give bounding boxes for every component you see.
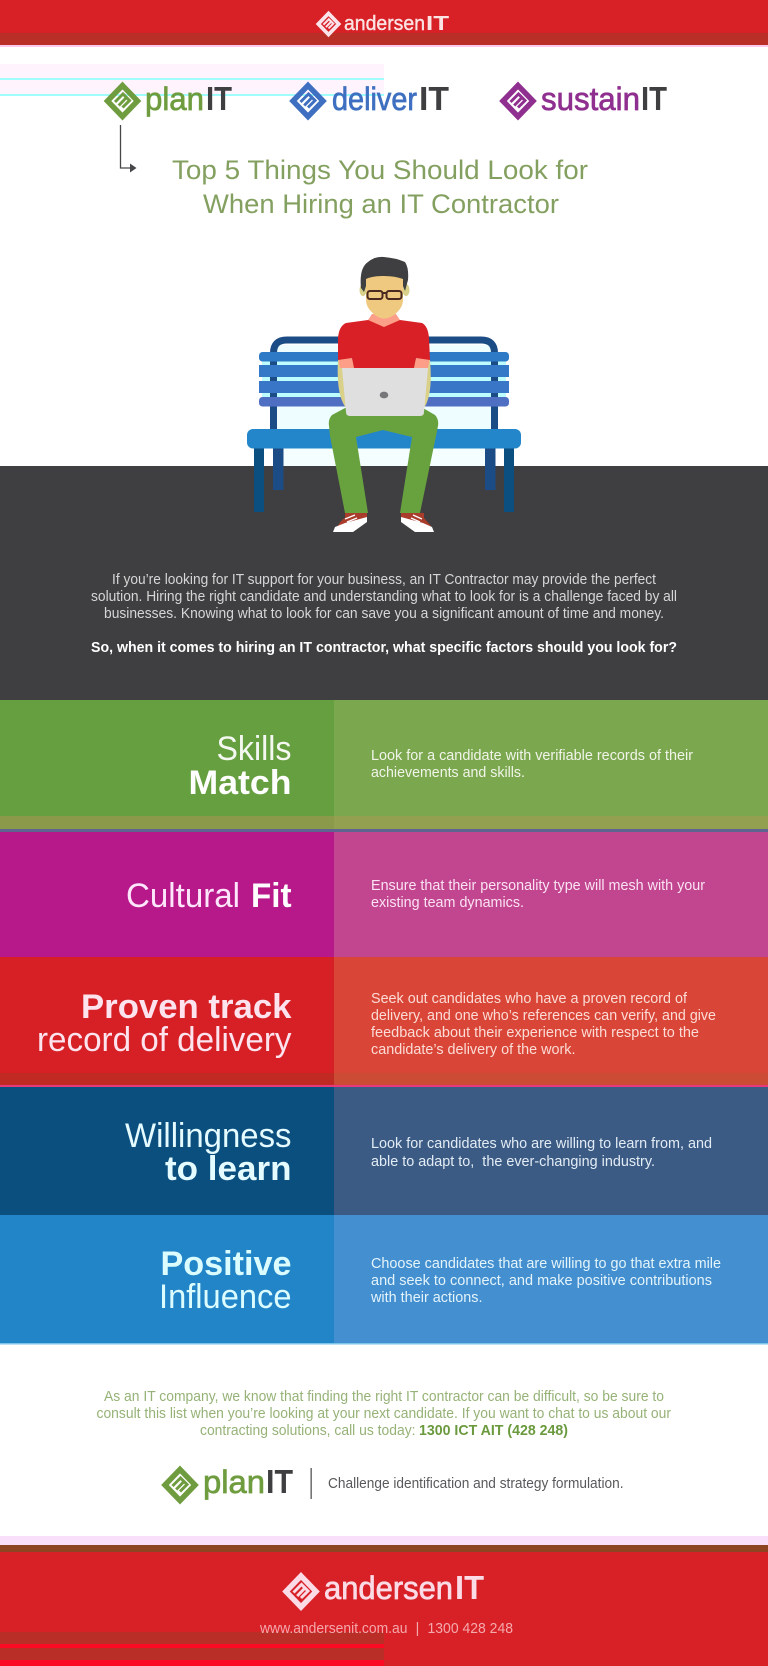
heading: willingness to learn: to learn [165, 1150, 292, 1188]
closing paragraph: consult this list when you’re looking at your next candidate. If you want to chat to us about our [96, 1406, 671, 1422]
shirt [338, 320, 430, 368]
logo: planIT: IT [206, 80, 232, 117]
dark intro panel [0, 466, 768, 700]
heading: cultural fit: Fit [251, 877, 292, 915]
hair [361, 257, 408, 292]
header logo: andersenIT: andersen [344, 13, 425, 35]
description: skills match: achievements and skills. [371, 765, 525, 781]
footer logo: andersenIT: IT [455, 1569, 484, 1606]
description: proven track record [371, 991, 716, 1058]
description: cultural fit: Ensure that their personality type will mesh with your [371, 878, 705, 894]
heading: positive influence [159, 1245, 292, 1316]
ears and face [360, 284, 366, 296]
footer logo: andersenIT: andersen [324, 1570, 453, 1606]
footer planIT logo: plan [203, 1464, 265, 1500]
header logo: andersenIT: IT [426, 13, 449, 35]
footer contact [259, 1620, 513, 1637]
panel: willingness to learn [0, 1087, 768, 1215]
man [329, 257, 438, 532]
description: skills match [371, 748, 693, 781]
heading: proven track record: Proven track [81, 988, 292, 1026]
panel: positive influence [0, 1215, 768, 1344]
bench [247, 340, 521, 512]
description: proven track record: delivery, and one who’s references can verify, and give [371, 1008, 716, 1024]
description: cultural fit: existing team dynamics. [371, 895, 524, 911]
heading: positive influence: Influence [159, 1278, 292, 1316]
logo: sustainIT: IT [641, 80, 667, 117]
title [172, 155, 588, 219]
panel: proven track record [0, 957, 768, 1087]
description: positive influence: with their actions. [370, 1290, 482, 1306]
footer planIT logo [165, 1463, 293, 1500]
intro paragraph: solution. Hiring the right candidate and understanding what to look for is a challenge faced by all [91, 589, 677, 605]
glasses [368, 291, 402, 299]
description: proven track record: feedback about their experience with respect to the [371, 1025, 699, 1041]
footer divider [310, 1468, 312, 1499]
description: willingness to learn [371, 1136, 712, 1170]
logo: deliverIT: IT [419, 80, 449, 117]
description: willingness to learn: Look for candidates who are willing to learn from, and [371, 1136, 712, 1152]
closing paragraph: As an IT company, we know that finding the right IT contractor can be difficult, so be sure to [104, 1389, 664, 1405]
closing paragraph: 1300 ICT AIT (428 248) [419, 1423, 568, 1439]
description: cultural fit [371, 878, 705, 911]
heading: skills match: Skills [216, 730, 292, 768]
description: proven track record: candidate’s delivery of the work. [371, 1042, 576, 1058]
footer planIT logo: IT [266, 1463, 293, 1500]
closing paragraph [96, 1389, 671, 1439]
description: skills match: Look for a candidate with verifiable records of their [371, 748, 693, 764]
logo: planIT [108, 80, 232, 117]
description: positive influence [370, 1256, 721, 1306]
panel: skills match [0, 700, 768, 832]
heading: proven track record [37, 988, 292, 1059]
heading: skills match: Match [188, 764, 292, 802]
panel: cultural fit [0, 832, 768, 957]
logo: deliverIT [293, 80, 449, 117]
intro question: So, when it comes to hiring an IT contractor, what specific factors should you look for? [91, 640, 677, 656]
footer band [0, 1536, 768, 1666]
footer logo: andersenIT [286, 1569, 484, 1607]
shoes [337, 513, 367, 527]
laptop [342, 368, 428, 416]
heading: cultural fit: Cultural [126, 877, 240, 915]
closing paragraph: contracting solutions, call us today: [200, 1423, 416, 1439]
logo: sustainIT [503, 80, 667, 117]
title: When Hiring an IT Contractor [203, 189, 559, 219]
description: positive influence: and seek to connect, and make positive contributions [371, 1273, 712, 1289]
intro paragraph [91, 572, 677, 622]
header band [0, 0, 768, 47]
intro paragraph: If you’re looking for IT support for your business, an IT Contractor may provide the perfect [112, 572, 656, 588]
heading: proven track record: record of delivery [37, 1021, 292, 1059]
header logo: andersenIT [318, 13, 449, 35]
illustration: man on a bench with laptop [247, 257, 521, 532]
heading: skills match [188, 730, 292, 802]
heading: willingness to learn [125, 1117, 292, 1188]
description: positive influence: Choose candidates that are willing to go that extra mile [371, 1256, 721, 1272]
title: Top 5 Things You Should Look for [172, 155, 588, 185]
intro paragraph: businesses. Knowing what to look for can save you a significant amount of time and money. [104, 606, 664, 622]
heading: positive influence: Positive [160, 1245, 292, 1283]
footer contact: | [416, 1620, 419, 1637]
planIT description: Challenge identification and strategy formulation. [328, 1475, 624, 1492]
arrow: plan to title [120, 125, 136, 172]
logo: deliverIT: deliver [332, 81, 417, 117]
description: proven track record: Seek out candidates who have a proven record of [371, 991, 688, 1007]
description: willingness to learn: able to adapt to, the ever-changing industry. [371, 1154, 655, 1170]
heading: willingness to learn: Willingness [125, 1117, 292, 1155]
legs [329, 408, 438, 513]
logo: sustainIT: sustain [541, 81, 640, 117]
logo: planIT: plan [145, 81, 204, 117]
footer contact: 1300 428 248 [428, 1620, 513, 1637]
footer contact: www.andersenit.com.au [259, 1620, 408, 1637]
